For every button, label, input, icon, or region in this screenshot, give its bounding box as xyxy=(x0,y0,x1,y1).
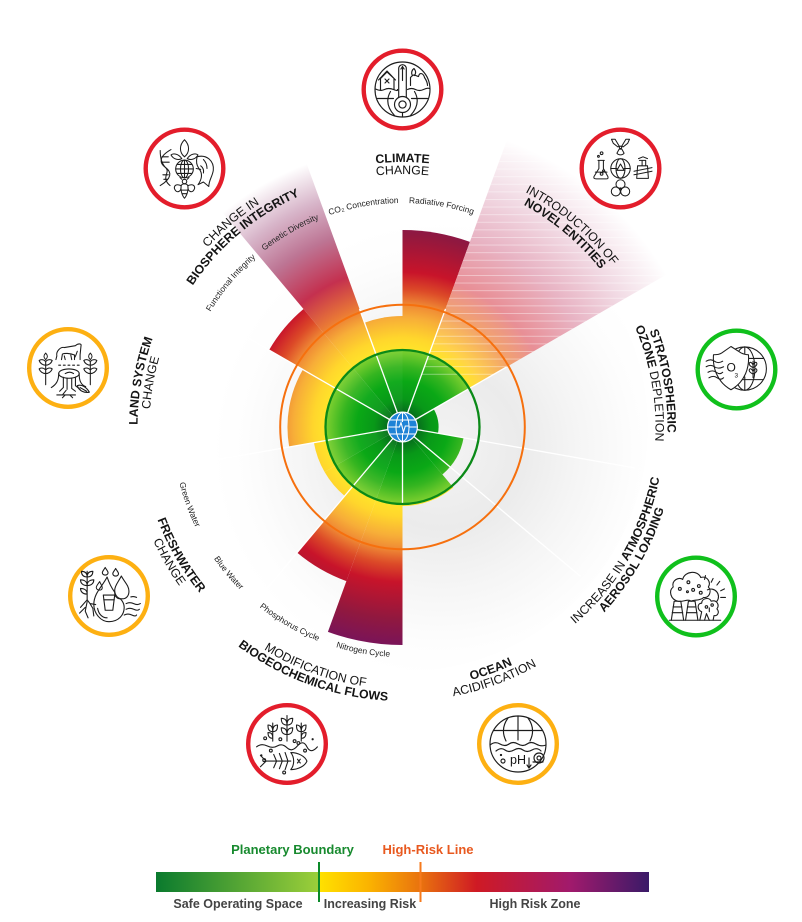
legend label: safe operating space: Safe Operating Space xyxy=(173,897,303,911)
high-risk marker xyxy=(420,862,422,902)
label: biogeochemical flows: BIOGEOCHEMICAL FLOWS xyxy=(238,640,388,700)
icon: freshwater change xyxy=(70,557,148,635)
sub-label: radiative forcing: Radiative Forcing xyxy=(410,197,474,216)
sub-label: blue water: Blue Water xyxy=(214,556,244,589)
center globe icon xyxy=(387,412,418,442)
planetary boundaries radial chart xyxy=(226,152,656,645)
legend xyxy=(156,842,649,911)
wedge: green water xyxy=(314,427,402,472)
icon: climate change xyxy=(364,51,441,128)
label: ozone depletion: STRATOSPHERIC xyxy=(650,329,676,432)
label: freshwater change: FRESHWATER xyxy=(158,517,205,593)
novel entities stripes xyxy=(422,176,638,375)
sector dividers xyxy=(170,307,634,609)
planetary boundary marker xyxy=(318,862,320,902)
label: land system change: CHANGE xyxy=(142,356,160,408)
pH symbol in ocean icon: pH xyxy=(510,753,526,767)
legend heading: planetary boundary: Planetary Boundary xyxy=(231,842,355,857)
label: ocean acidification: ACIDIFICATION xyxy=(453,658,536,696)
label: novel entities: NOVEL ENTITIES xyxy=(524,198,606,268)
label: climate change xyxy=(376,154,430,176)
sub-label: green water: Green Water xyxy=(180,482,200,526)
legend label: increasing risk: Increasing Risk xyxy=(324,897,416,911)
sub-label: functional integrity: Functional Integrity xyxy=(206,254,255,312)
label: aerosol loading: INCREASE IN ATMOSPHERIC xyxy=(570,477,659,624)
wedge: aerosol loading xyxy=(402,427,464,474)
wedge: genetic diversity xyxy=(222,164,402,427)
icon: novel entities xyxy=(582,130,659,207)
O3 symbol in ozone icon xyxy=(726,360,738,380)
icon: biogeochemical flows xyxy=(248,705,326,783)
label: ozone depletion: OZONE DEPLETION xyxy=(636,326,664,441)
sub-label: genetic diversity: Genetic Diversity xyxy=(262,215,318,250)
wedge: ocean acidification xyxy=(402,427,453,506)
icon: biosphere integrity xyxy=(146,130,223,207)
icon: stratospheric ozone xyxy=(698,331,775,408)
O3 symbol in ozone icon: 3 xyxy=(734,372,738,380)
wedge: CO2 concentration xyxy=(364,316,402,427)
label: land system change: LAND SYSTEM xyxy=(129,336,152,424)
legend label: high risk zone: High Risk Zone xyxy=(490,897,581,911)
icon: land system change xyxy=(29,329,107,407)
wedge: blue water xyxy=(325,427,402,496)
wedge: novel entities xyxy=(402,140,667,427)
label: biosphere integrity: BIOSPHERE INTEGRITY xyxy=(186,188,297,285)
label: ozone depletion xyxy=(636,326,676,441)
label: climate change: CLIMATE xyxy=(376,154,430,164)
label: biogeochemical flows: MODIFICATION OF xyxy=(264,642,367,686)
O3 symbol in ozone icon: O xyxy=(726,360,736,374)
sub-label: nitrogen cycle: Nitrogen Cycle xyxy=(336,642,390,658)
legend heading: high-risk line: High-Risk Line xyxy=(382,842,474,857)
label: novel entities: INTRODUCTION OF xyxy=(526,185,619,263)
wedge: radiative forcing xyxy=(402,230,470,427)
wedge: nitrogen cycle xyxy=(328,427,402,645)
label: climate change: CHANGE xyxy=(376,166,429,176)
lighter sub-sectors inside the safe zone xyxy=(327,350,402,499)
sub-label: phosphorus cycle: Phosphorus Cycle xyxy=(260,603,319,640)
icon: ocean acidification xyxy=(479,705,557,783)
label: freshwater change: CHANGE xyxy=(154,538,186,586)
legend gradient bar xyxy=(156,872,649,892)
wedge: phosphorus cycle xyxy=(297,427,402,581)
wedge: stratospheric ozone xyxy=(402,409,439,433)
icon: aerosol loading xyxy=(657,558,735,635)
wedge: functional integrity xyxy=(269,309,402,427)
planetary boundary ring xyxy=(326,350,480,504)
label: aerosol loading: AEROSOL LOADING xyxy=(600,508,663,612)
label: ocean acidification: OCEAN xyxy=(470,657,512,679)
high-risk line ring xyxy=(280,305,525,549)
background gray disc xyxy=(158,182,648,672)
label: biosphere integrity: CHANGE IN xyxy=(203,197,259,246)
wedge: land system xyxy=(287,370,402,447)
sub-label: CO2 concentration: CO₂ Concentration xyxy=(328,197,398,214)
